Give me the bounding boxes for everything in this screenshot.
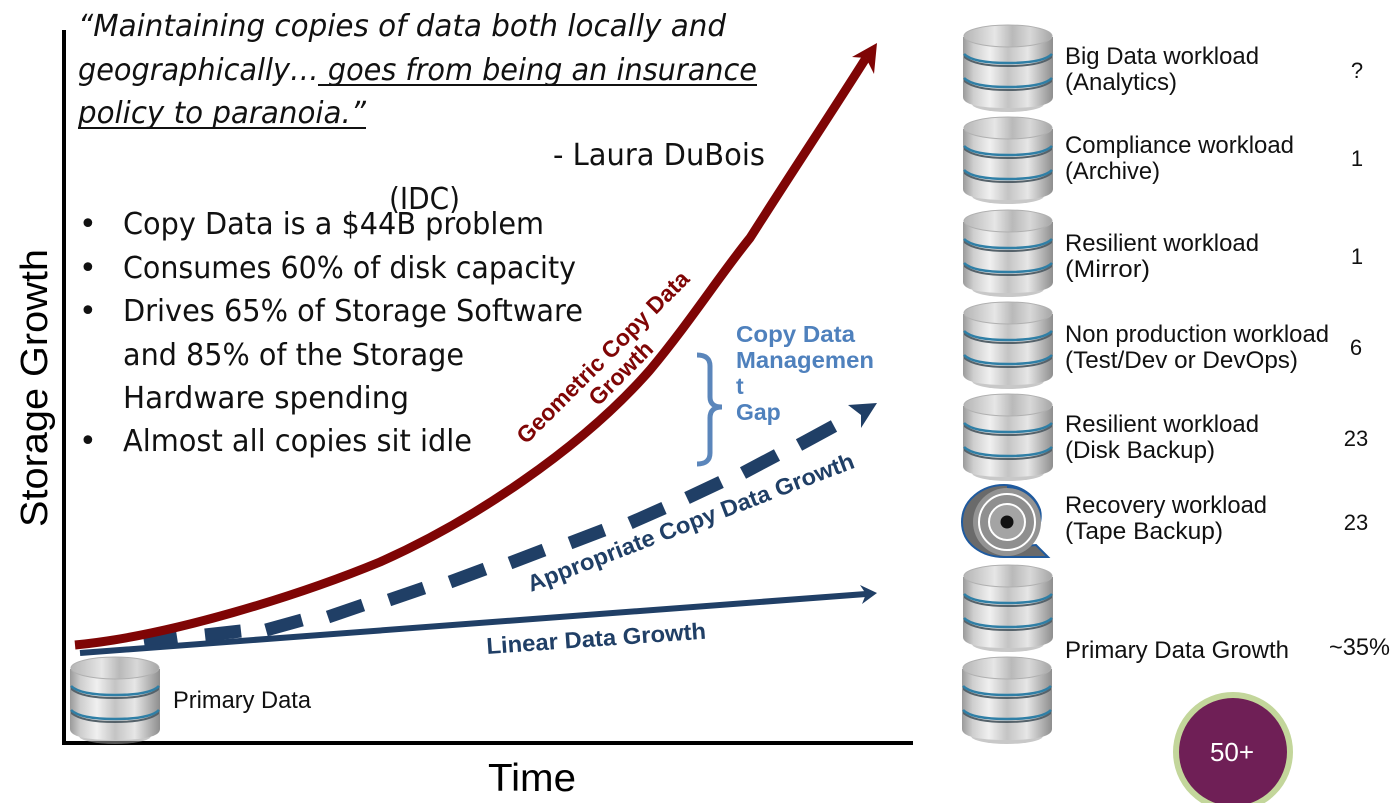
row: non production workload: 6 (1350, 335, 1362, 360)
bullet list: Drives 65% of Storage Software (123, 294, 583, 329)
quote attribution: - Laura DuBois (553, 138, 765, 173)
row: recovery workload: 23 (1344, 510, 1368, 535)
label: geometric copy data growth: Growth (583, 336, 658, 411)
row: resilient workload mirror: 1 (1351, 244, 1363, 269)
row: resilient workload mirror: Resilient workload (1065, 230, 1259, 257)
label: geometric copy data growth: Geometric Copy Data (511, 265, 694, 449)
quote attribution (389, 138, 765, 217)
bullet list: Almost all copies sit idle (123, 424, 472, 459)
icon: cylinder non production (963, 302, 1053, 389)
quote: geographically… goes from being an insurance (78, 53, 757, 88)
icon: cylinder primary data two (962, 657, 1052, 744)
label: copy data management gap: Gap (736, 399, 781, 425)
row: big data workload: ? (1351, 58, 1363, 83)
total badge (1176, 695, 1290, 803)
row: non production workload: (Test/Dev or DevOps) (1065, 347, 1298, 374)
brace: gap (697, 355, 722, 464)
label: primary data: Primary Data (173, 687, 312, 714)
icon: tape reel (962, 485, 1048, 557)
row: recovery workload (1065, 492, 1368, 545)
row: non production workload: Non production workload (1065, 321, 1329, 348)
row: big data workload: (Analytics) (1065, 69, 1177, 96)
dashed line: appropriate copy data growth (144, 403, 877, 642)
row: non production workload (1065, 321, 1362, 374)
icon: cylinder disk backup (963, 394, 1053, 481)
row: resilient workload disk backup: Resilient workload (1065, 411, 1259, 438)
label: copy data management gap: t (736, 373, 744, 399)
quote attribution: (IDC) (389, 182, 460, 217)
label: linear data growth: Linear Data Growth (486, 618, 707, 659)
icon: cylinder big data (963, 25, 1053, 112)
bullet list: • (79, 294, 97, 329)
line: linear data growth (80, 585, 877, 653)
x axis title: Time (488, 757, 576, 800)
label: copy data management gap: Managemen (736, 347, 874, 373)
icon: cylinder primary data one (963, 565, 1053, 652)
row: recovery workload: Recovery workload (1065, 492, 1267, 519)
row: resilient workload mirror: (Mirror) (1065, 256, 1150, 283)
bullet list: Copy Data is a $44B problem (123, 207, 544, 242)
row: big data workload (1065, 43, 1363, 96)
curve: geometric copy data growth (75, 43, 877, 645)
row: primary data growth: ~35% (1329, 634, 1390, 661)
row: resilient workload disk backup: (Disk Backup) (1065, 437, 1215, 464)
quote: policy to paranoia.” (77, 96, 366, 131)
bullet list: • (79, 251, 97, 286)
quote: “Maintaining copies of data both locally and (78, 9, 727, 44)
y axis title: Storage Growth (14, 249, 56, 527)
bullet list (79, 207, 583, 459)
bullet list: • (79, 207, 97, 242)
row: resilient workload disk backup (1065, 411, 1368, 464)
bullet list: Hardware spending (123, 381, 409, 416)
label: copy data management gap: Copy Data (736, 321, 855, 347)
icon: primary data cylinder (70, 657, 160, 744)
row: compliance workload (1065, 132, 1363, 185)
icon: cylinder mirror (963, 210, 1053, 297)
quote (77, 9, 757, 131)
bullet list: • (79, 424, 97, 459)
row: resilient workload mirror (1065, 230, 1363, 283)
row: compliance workload: 1 (1351, 146, 1363, 171)
bullet list: and 85% of the Storage (123, 338, 464, 373)
chart axes (62, 30, 913, 745)
icon: cylinder compliance (963, 117, 1053, 204)
row: resilient workload disk backup: 23 (1344, 426, 1368, 451)
total badge: 50+ (1210, 737, 1254, 767)
label: appropriate copy data growth: Appropriate Copy Data Growth (523, 448, 858, 597)
label: copy data management gap (736, 321, 874, 425)
row: recovery workload: (Tape Backup) (1065, 518, 1223, 545)
row: compliance workload: Compliance workload (1065, 132, 1294, 159)
row: primary data growth: Primary Data Growth (1065, 637, 1289, 664)
row: compliance workload: (Archive) (1065, 158, 1160, 185)
bullet list: Consumes 60% of disk capacity (123, 251, 576, 286)
row: big data workload: Big Data workload (1065, 43, 1259, 70)
row: primary data growth (1065, 634, 1390, 664)
